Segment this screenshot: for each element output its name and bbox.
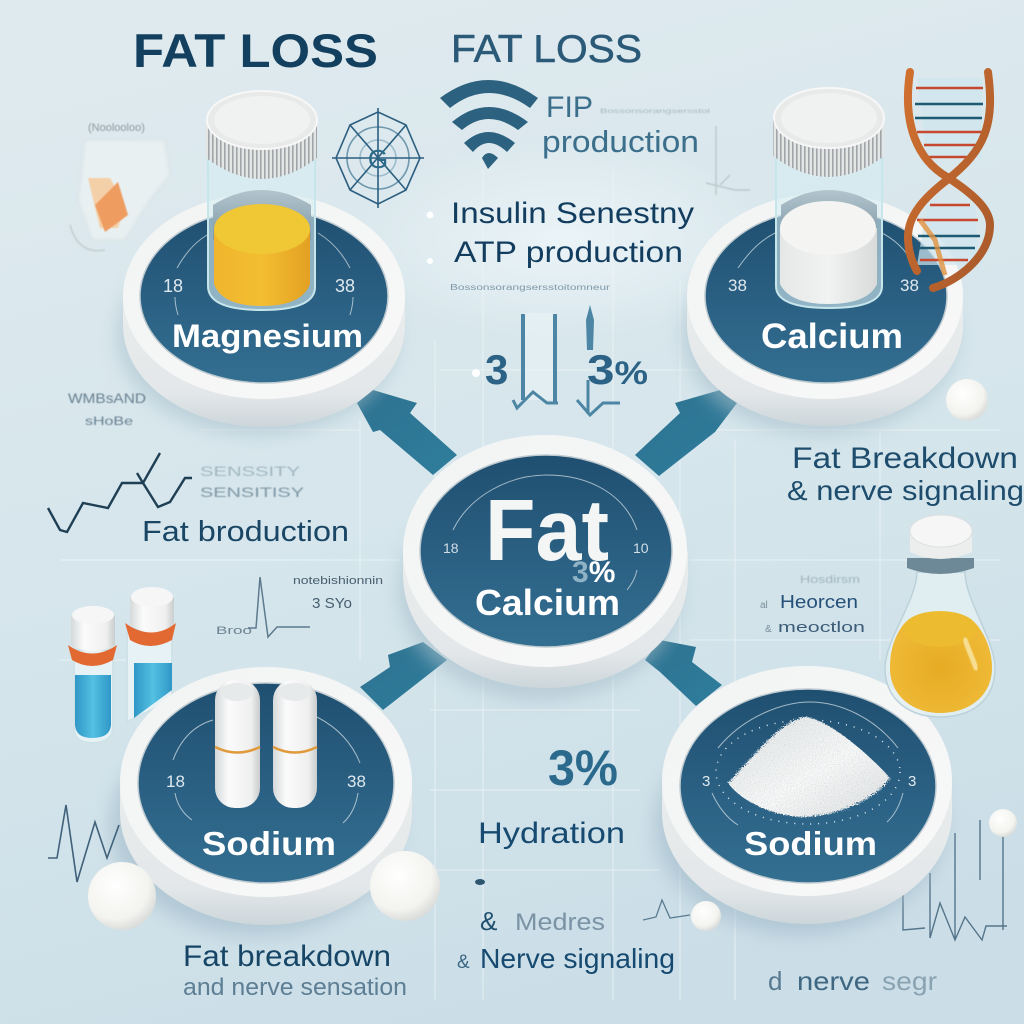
dial numbers: 38 [335,276,355,296]
dial numbers: 18 [163,276,183,296]
faint text: sensitivity: SENSSITY [200,463,301,479]
powder pile [716,717,900,824]
text: FIP production: FIP [546,91,593,124]
capsules [215,680,317,808]
text: centre hydration block: 3% [548,740,618,796]
dial [140,209,388,383]
dial numbers [166,772,366,791]
small notes with pulse [216,575,383,637]
text: fat breakdown and nerve signaling right: & nerve signaling [787,475,1024,506]
text: FIP production: production [542,124,699,159]
small pulse line [643,900,690,920]
text: centre hydration block [457,740,675,974]
dial numbers: 10 [633,540,649,556]
icon: small white spheres [691,809,1017,931]
small notes with pulse: 3 SYo [312,595,352,612]
faint text: hormone regulation: al [760,600,768,611]
icon: wifi signal [440,80,538,169]
text: centre hydration block: Hydration [478,817,625,850]
dial numbers: 18 [443,540,459,556]
dial numbers [728,276,919,295]
dial numbers [163,276,355,296]
panel: sodium left [110,667,412,935]
dial [420,455,672,647]
faint text: hormone regulation [760,574,865,636]
label: Calcium: Calcium [475,582,620,623]
small notes with pulse: notebishionnin [293,575,383,587]
text: fat breakdown and nerve signaling right [787,442,1024,506]
dial numbers: 3 [908,773,916,790]
text: insulin sensitivity, ATP production [426,197,694,269]
chart: arrows with percentages: 3 [485,346,508,393]
faint side sketch [706,126,750,195]
faint text: hormone regulation: & [765,624,772,635]
dial numbers [702,773,916,790]
faint caption top right: Bossonsorangsersstoi [600,109,710,115]
jar cap [773,88,884,177]
text: fat breakdown lower left: Fat breakdown [183,940,391,973]
icon: target web: G [368,144,388,174]
faint caption: Bossonsorangsersstoitomneur [450,283,610,292]
text: nerve segment [768,966,937,996]
label: Sodium [202,825,336,862]
text: insulin sensitivity, ATP production: Insulin Senestny [451,197,694,230]
dial [680,689,936,883]
text: nerve segment: d [768,966,782,996]
faint text: hormone regulation: Hosdirsm [800,574,860,586]
text: fat breakdown and nerve signaling right: Fat Breakdown [792,442,1018,475]
panel: centre fat [398,435,688,700]
panel: magnesium [117,91,405,435]
dial numbers [443,540,649,556]
chart: pulse line left [48,453,192,532]
text: fat production: Fat broduction [142,516,349,548]
jar with yellow powder [206,91,317,310]
jar cap [206,91,317,179]
label: Fat: Fat [485,482,609,579]
panel: sodium right [655,666,952,935]
icon: white spheres [88,379,988,930]
icon: target web [332,108,424,208]
text: centre hydration block: Medres [515,909,605,936]
faint text: hormone regulation: meoctlon [778,619,865,636]
text: centre hydration block: Nerve signaling [480,943,675,974]
icon: flask with oil [885,515,995,717]
dial [705,209,947,383]
panel: calcium [682,88,963,435]
faint text: left notes [68,390,146,428]
label: Calcium [761,317,903,356]
text: nerve segment: nerve [797,966,870,996]
text: centre hydration block: & [457,952,470,973]
title: FAT LOSS bold: FAT LOSS [133,24,378,77]
text: FIP production [542,91,699,159]
chart: pulse lower left [48,805,119,882]
chart: arrows with percentages [472,305,648,415]
label: Magnesium [172,318,363,354]
dial numbers: 18 [166,772,185,791]
dial numbers: 38 [728,276,747,295]
dial numbers: 38 [900,276,919,295]
label: Sodium [744,825,877,862]
faint illustration: organ sketch: (Noolooloo) [88,122,145,134]
chart: pulse lower right [903,820,1007,940]
label: 3%: 3% [572,556,615,589]
text: insulin sensitivity, ATP production: ATP production [454,236,683,269]
dial numbers: 38 [347,772,366,791]
chart: arrows with percentages: 3% [587,346,648,393]
dial numbers: 3 [702,773,710,790]
icon: test tubes [68,587,176,743]
dial [138,683,394,883]
faint text: sensitivity [200,463,305,500]
jar with white powder [773,88,884,308]
faint text: sensitivity: SENSITISY [200,484,305,500]
faint text: left notes: sHoBe [85,414,133,428]
icon: DNA helix [908,72,990,288]
text: and nerve sensation: and nerve sensation [183,974,407,1001]
title: FAT LOSS secondary: FAT LOSS [451,28,642,71]
arrows to centre [357,390,737,710]
faint illustration: organ sketch [70,122,170,251]
faint text: left notes: WMBsAND [68,390,146,406]
small notes with pulse: Broo [216,625,252,637]
faint text: hormone regulation: Heorcen [780,592,858,612]
text: centre hydration block: & [480,906,497,936]
text: nerve segment: segr [882,966,937,996]
